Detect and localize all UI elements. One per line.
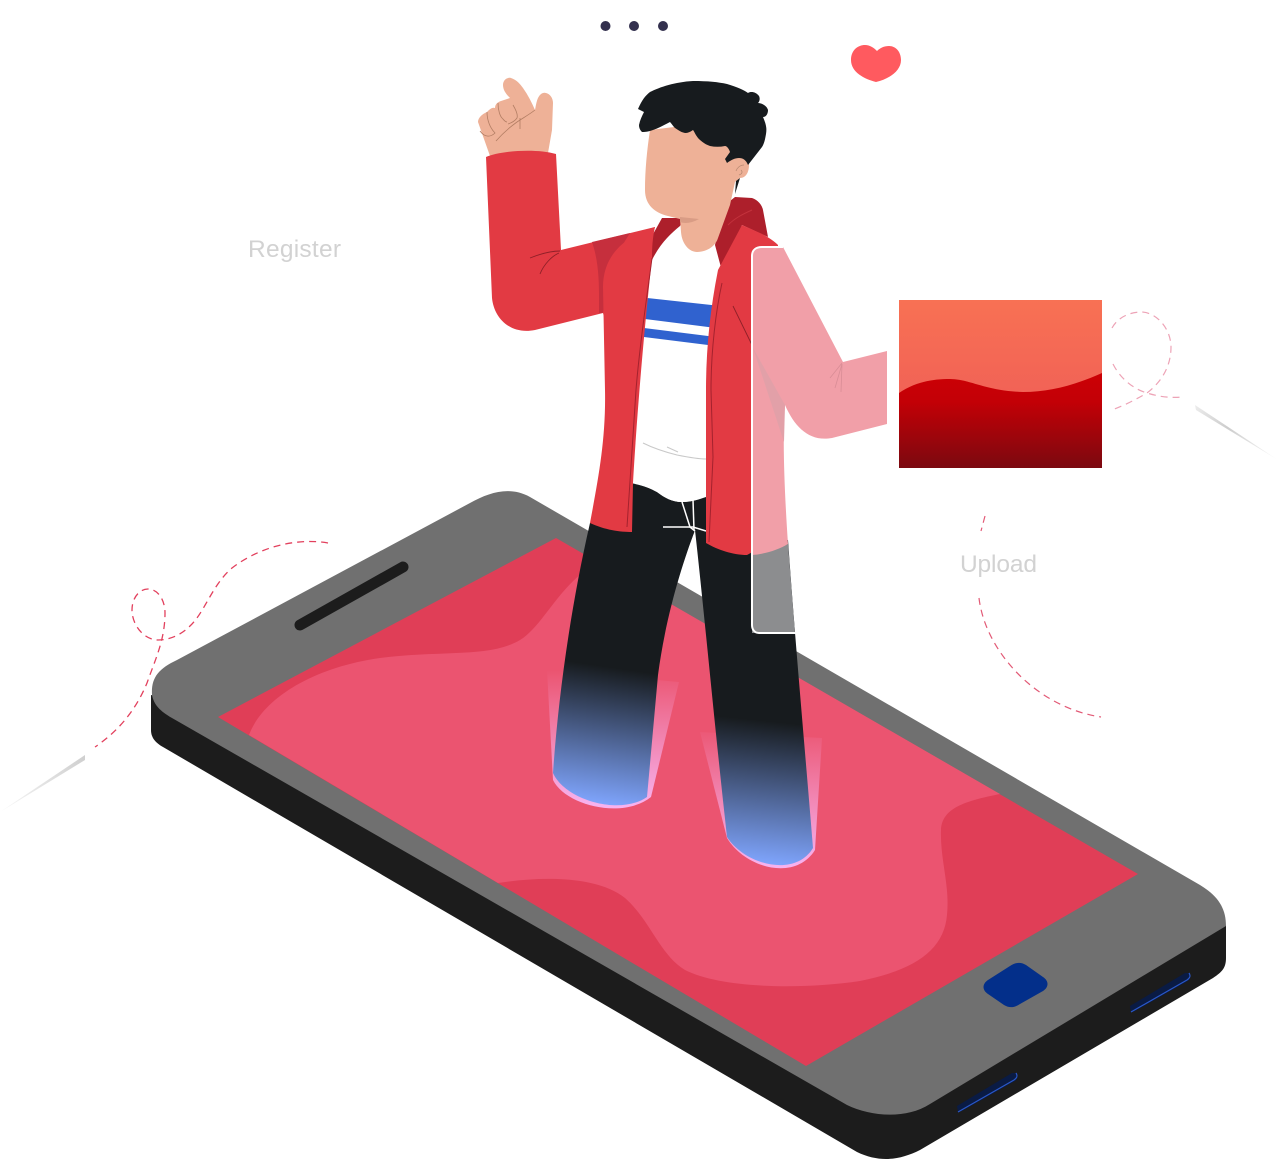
light beams (547, 670, 822, 868)
phone screen (218, 538, 1138, 1066)
pink creases (830, 363, 842, 392)
left leg (553, 523, 695, 805)
raised hand (478, 78, 553, 156)
neck and face (645, 125, 749, 252)
phone top face (152, 491, 1226, 1115)
label: Upload: Upload (960, 551, 1037, 578)
icon: heart (851, 45, 901, 82)
pink fold shadow (753, 348, 785, 442)
t-shirt (630, 222, 722, 502)
hood (715, 197, 768, 275)
hair (638, 81, 768, 165)
right leg (695, 530, 813, 865)
card wave (899, 373, 1102, 468)
trousers (553, 483, 813, 865)
label: Register: Register (248, 236, 341, 263)
drawstrings (663, 500, 706, 531)
screen wave (249, 563, 1000, 986)
dashed path: right loop (1112, 312, 1184, 410)
dashed path: left loop (95, 541, 328, 747)
jacket left panel (590, 227, 655, 532)
ear line (736, 165, 744, 175)
upload card (899, 300, 1102, 468)
notch (300, 567, 403, 625)
dashed arc: upload (979, 516, 1101, 717)
neck shadow (680, 217, 699, 223)
needle: right (1195, 405, 1278, 460)
hair strand below ear (735, 178, 740, 194)
man (478, 78, 887, 868)
speaker left (957, 1073, 1017, 1112)
speaker right (1130, 973, 1190, 1012)
raised arm (486, 151, 655, 340)
gray trouser through glass panel (752, 544, 795, 633)
home button (984, 963, 1048, 1007)
jacket right panel (706, 225, 778, 555)
arm shadow (592, 233, 630, 313)
phone side (151, 695, 1226, 1159)
sleeve creases (530, 251, 560, 274)
pink arm through glass panel (752, 247, 887, 555)
hood crease (728, 210, 752, 225)
phone (151, 491, 1226, 1159)
shirt stripes (645, 298, 716, 328)
needle: left (0, 755, 85, 812)
dots (600, 21, 668, 31)
glass panel outline (752, 247, 796, 633)
